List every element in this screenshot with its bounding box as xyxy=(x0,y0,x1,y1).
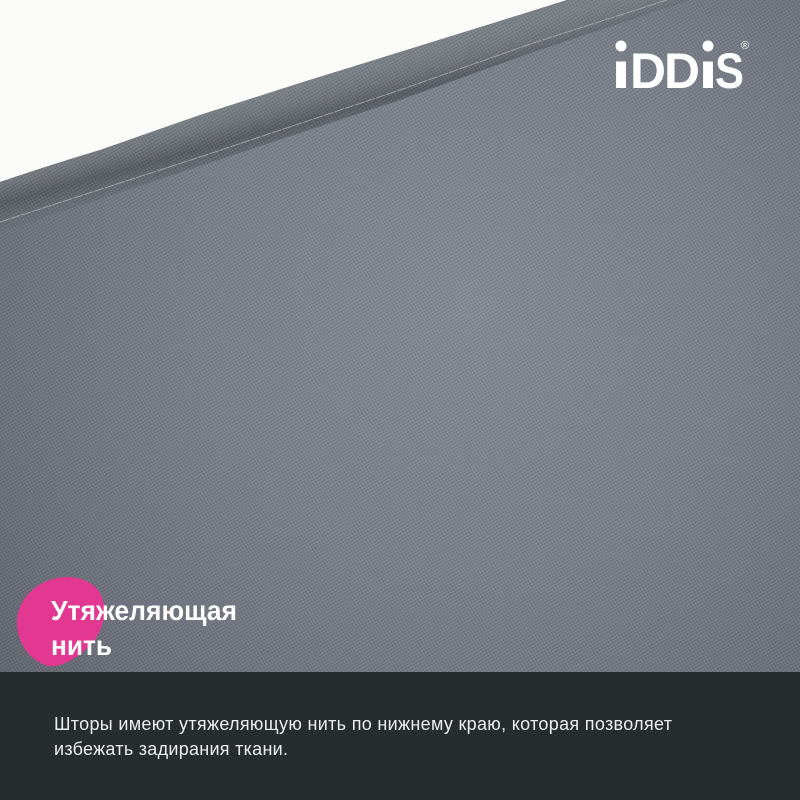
heading: нить xyxy=(51,630,112,661)
fabric hem fold xyxy=(0,0,690,232)
logo: iddis: ı xyxy=(698,43,718,99)
logo: iddis: ı xyxy=(611,43,631,99)
logo: iddis: S xyxy=(715,43,744,99)
heading xyxy=(51,595,237,661)
hem stitching xyxy=(0,0,667,222)
description text xyxy=(54,714,672,759)
logo: iddis: D xyxy=(664,43,700,99)
logo: iddis xyxy=(611,40,749,99)
heading: Утяжеляющая xyxy=(51,595,237,626)
pink blob accent xyxy=(17,577,104,666)
registered mark: ® xyxy=(741,40,749,52)
description text: Шторы имеют утяжеляющую нить по нижнему краю, которая позволяет xyxy=(54,714,672,734)
description text: избежать задирания ткани. xyxy=(54,739,288,759)
logo: iddis: D xyxy=(630,43,666,99)
bottom dark band xyxy=(0,672,800,800)
